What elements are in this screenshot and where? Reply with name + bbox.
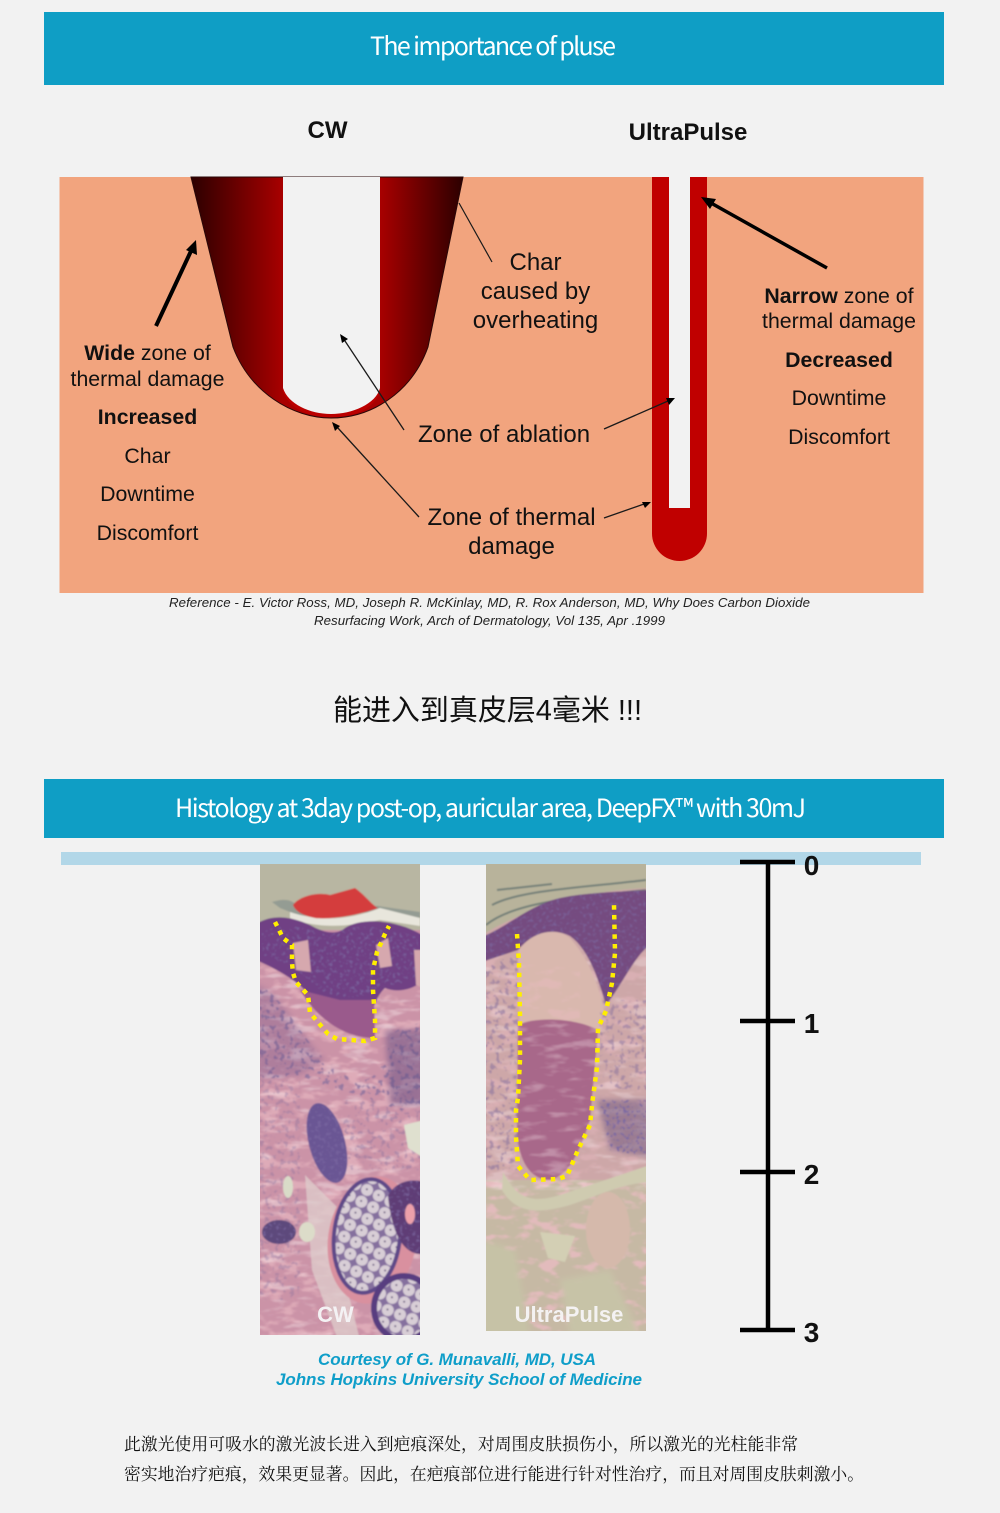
sky above skin xyxy=(256,860,424,930)
panel: laser damage diagram xyxy=(60,177,924,593)
coagulated zone xyxy=(300,990,375,1038)
epidermis xyxy=(260,916,420,1006)
diagram: CW wide crater xyxy=(191,177,463,418)
text: narrow zone list: Decreased xyxy=(785,348,893,372)
text: wide zone list: Downtime xyxy=(100,482,195,506)
text: wide zone list: Discomfort xyxy=(97,521,198,545)
chinese headline: 能进入到真皮层4毫米 !!! xyxy=(333,694,642,727)
dotted outline: UltraPulse xyxy=(516,905,615,1180)
heading: CW: CW xyxy=(308,117,348,144)
reference citation: Resurfacing Work, Arch of Dermatology, Vol 135, Apr .1999 xyxy=(314,613,666,628)
scale numbers: 3 xyxy=(804,1317,819,1348)
text: char caused by overheating: caused by xyxy=(481,278,590,305)
scale numbers xyxy=(804,850,819,1348)
dotted outline: CW xyxy=(275,922,389,1041)
histology image: UltraPulse xyxy=(482,860,650,1335)
pink follicle sheath xyxy=(327,1176,414,1304)
text: zone of thermal damage: Zone of thermal xyxy=(427,504,596,531)
label: UltraPulse on image: UltraPulse xyxy=(515,1302,623,1327)
text: wide zone list: thermal damage xyxy=(71,367,224,391)
scale numbers: 0 xyxy=(804,850,819,881)
reference citation: Reference - E. Victor Ross, MD, Joseph R. McKinlay, MD, R. Rox Anderson, MD, Why Does Carbon Dioxide xyxy=(169,595,810,610)
text: char caused by overheating: Char xyxy=(509,249,562,276)
text: narrow zone list: Narrow zone of xyxy=(764,284,914,308)
arrow: wide zone xyxy=(156,240,197,326)
eschar crust xyxy=(293,888,378,918)
light blue skin surface bar xyxy=(61,852,921,865)
arrow: zone of ablation CW xyxy=(340,334,404,430)
text: narrow zone list xyxy=(762,284,916,449)
pale stroma strip xyxy=(305,1175,360,1340)
heading: UltraPulse: UltraPulse xyxy=(629,119,747,146)
arrow: zone of ablation UltraPulse xyxy=(604,398,675,429)
dark gland cluster xyxy=(262,1220,296,1244)
sky above skin xyxy=(486,864,646,932)
courtesy credit: Johns Hopkins University School of Medicine xyxy=(276,1370,642,1389)
text: narrow zone list: thermal damage xyxy=(762,309,916,333)
scale numbers: 1 xyxy=(804,1008,819,1039)
body paragraph: 此激光使用可吸水的激光波长进入到疤痕深处，对周围皮肤损伤小，所以激光的光柱能非常 xyxy=(124,1435,798,1454)
lower gland xyxy=(370,1272,420,1335)
text: char caused by overheating: overheating xyxy=(473,307,598,334)
courtesy credit xyxy=(276,1350,642,1389)
epidermis xyxy=(482,890,650,1005)
body paragraph xyxy=(124,1435,864,1484)
text: wide zone list: Increased xyxy=(98,405,197,429)
reference citation xyxy=(169,595,810,628)
depth scale xyxy=(740,850,819,1348)
line: char xyxy=(459,203,492,262)
arrow: zone of thermal damage UltraPulse xyxy=(604,502,651,518)
crust scale xyxy=(272,900,420,918)
diagram: UltraPulse narrow channel xyxy=(652,177,707,561)
scale numbers: 2 xyxy=(804,1159,819,1190)
banner title: Histology at 3day post-op, auricular area, DeepFX™ with 30mJ xyxy=(175,789,806,825)
sebaceous gland xyxy=(328,1176,406,1296)
white gap under crust xyxy=(290,908,420,926)
hair follicle right xyxy=(388,1181,424,1254)
thermal coagulum xyxy=(517,1020,598,1180)
text: narrow zone list: Discomfort xyxy=(788,425,890,449)
follicle xyxy=(306,1102,348,1184)
text: wide zone list: Char xyxy=(124,444,171,468)
text: char caused by overheating xyxy=(473,249,598,334)
courtesy credit: Courtesy of G. Munavalli, MD, USA xyxy=(318,1350,596,1369)
banner title: The importance of pluse xyxy=(370,27,616,63)
histology image: CW xyxy=(260,864,420,1335)
inflammatory cells xyxy=(597,1100,650,1157)
label: CW on image: CW xyxy=(317,1302,354,1327)
arrow: zone of thermal damage CW xyxy=(332,422,419,517)
pale dermal wedges xyxy=(293,940,311,972)
text: zone of thermal damage: damage xyxy=(468,533,555,560)
dark cell flecks left and right xyxy=(486,958,518,1170)
inflammatory cell clusters xyxy=(256,985,424,1110)
pale gaps xyxy=(404,1120,420,1156)
text: narrow zone list: Downtime xyxy=(792,386,886,410)
banner: histology xyxy=(44,779,944,838)
stratum corneum xyxy=(486,880,646,925)
text: zone of thermal damage xyxy=(427,504,596,560)
papillary dermis xyxy=(518,932,604,1028)
banner: the importance of pulse xyxy=(44,12,944,85)
collagen fibres xyxy=(256,960,424,1340)
pale cavities xyxy=(502,1165,650,1210)
arrow: narrow zone xyxy=(701,197,827,268)
text: wide zone list xyxy=(71,341,224,545)
pale dermal whorl xyxy=(586,1192,630,1268)
text: wide zone list: Wide zone of xyxy=(84,341,211,365)
text: zone of ablation: Zone of ablation xyxy=(418,421,590,448)
body paragraph: 密实地治疗疤痕，效果更显著。因此，在疤痕部位进行能进行针对性治疗，而且对周围皮肤刺激小。 xyxy=(124,1465,864,1484)
lower tissue base xyxy=(482,1180,650,1335)
